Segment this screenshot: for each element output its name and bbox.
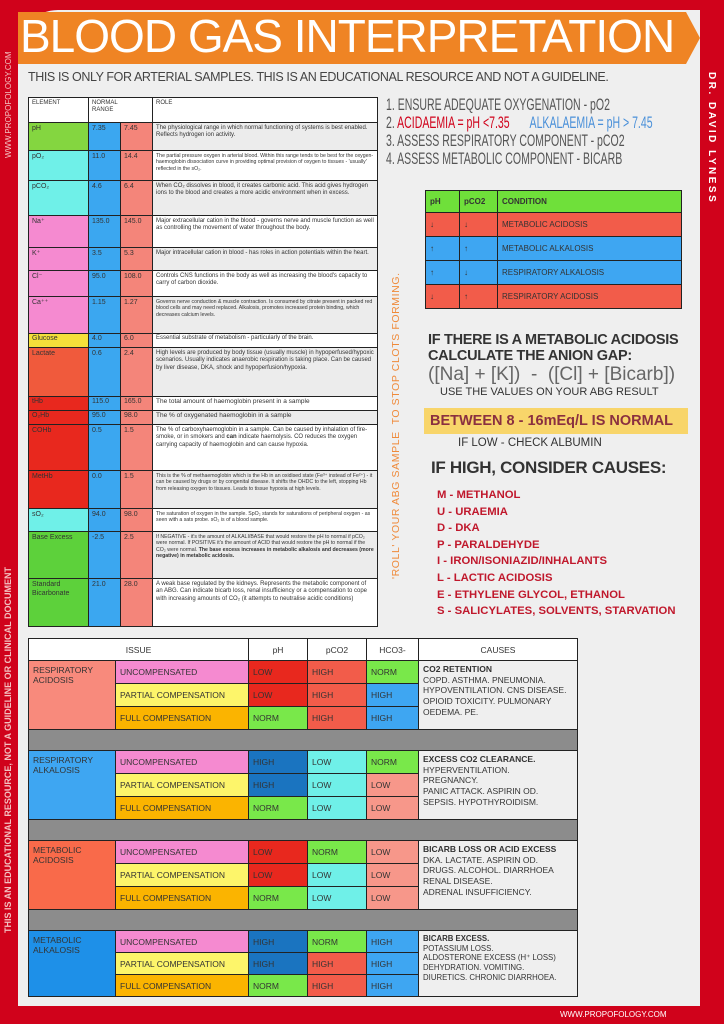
element reference table: High levels are produced by body tissue (usually muscle) in hypoperfused/hypoxic scenarios. Usually indicates anaerobic respiration is taking place. Can be caused by liver disease, DKA, shock and hypoperfusion/hypoxia. bbox=[156, 350, 374, 371]
element reference table: sO₂ bbox=[32, 511, 44, 518]
compensation table: EXCESS CO2 CLEARANCE. bbox=[423, 754, 535, 764]
compensation table: HIGH bbox=[371, 690, 392, 700]
element reference table: 0.6 bbox=[92, 350, 102, 357]
MUDPILES list: I - IRON/ISONIAZID/INHALANTS bbox=[437, 555, 607, 567]
compensation table: LOW bbox=[371, 847, 390, 857]
compensation table: COPD. ASTHMA. PNEUMONIA. HYPOVENTILATION. CNS DISEASE. OPIOID TOXICITY. PULMONARY OEDEMA. PE. bbox=[423, 675, 566, 716]
compensation table: HIGH bbox=[312, 713, 333, 723]
compensation table: HIGH bbox=[371, 713, 392, 723]
element reference table: 95.0 bbox=[92, 273, 106, 280]
element reference table: The physiological range in which normal functioning of systems is best enabled. Reflects hydrogen ion activity. bbox=[156, 125, 367, 138]
element reference table: 4.0 bbox=[92, 335, 102, 342]
low albumin note: IF LOW - CHECK ALBUMIN bbox=[458, 437, 602, 449]
compensation table: HIGH bbox=[371, 936, 392, 946]
subtitle: THIS IS ONLY FOR ARTERIAL SAMPLES. THIS IS AN EDUCATIONAL RESOURCE AND NOT A GUIDELINE. bbox=[28, 70, 608, 84]
MUDPILES list bbox=[437, 489, 676, 617]
element reference table: tHb bbox=[32, 398, 43, 405]
compensation table: HIGH bbox=[253, 757, 274, 767]
compensation table: METABOLIC ALKALOSIS bbox=[33, 935, 82, 955]
compensation table: CAUSES bbox=[481, 644, 515, 654]
compensation table bbox=[28, 638, 578, 997]
compensation table: LOW bbox=[312, 780, 331, 790]
compensation table: LOW bbox=[312, 893, 331, 903]
condition table: METABOLIC ACIDOSIS bbox=[502, 220, 588, 229]
element reference table: 6.0 bbox=[124, 335, 134, 342]
steps list: 2. ACIDAEMIA = pH <7.35 ALKALAEMIA = pH > 7.45 bbox=[386, 113, 653, 132]
compensation table: HIGH bbox=[312, 667, 333, 677]
compensation table: FULL COMPENSATION bbox=[120, 713, 211, 723]
element reference table: Base Excess bbox=[32, 534, 72, 541]
condition table: ↑ bbox=[430, 244, 434, 253]
MUDPILES list: S - SALICYLATES, SOLVENTS, STARVATION bbox=[437, 605, 676, 617]
element reference table: 98.0 bbox=[124, 511, 138, 518]
causes heading: IF HIGH, CONSIDER CAUSES: bbox=[431, 458, 666, 477]
element reference table: O₂Hb bbox=[32, 412, 49, 419]
MUDPILES list: E - ETHYLENE GLYCOL, ETHANOL bbox=[437, 589, 625, 601]
compensation table: POTASSIUM LOSS. bbox=[423, 944, 494, 953]
element reference table: The % of carboxyhaemoglobin in a sample. Can be caused by inhalation of fire-smoke, or in smokers and can indicate haemolysis. CO reduces the oxygen carrying capacity of haemoglobin and can cause hypoxia. bbox=[156, 427, 367, 448]
compensation table: HIGH bbox=[253, 936, 274, 946]
condition table: pCO2 bbox=[464, 197, 485, 206]
condition table: RESPIRATORY ACIDOSIS bbox=[502, 292, 598, 301]
compensation table: pCO2 bbox=[326, 644, 348, 654]
compensation table: NORM bbox=[253, 713, 279, 723]
steps list: 4. ASSESS METABOLIC COMPONENT - BICARB bbox=[386, 149, 622, 168]
condition table: ↓ bbox=[430, 220, 434, 229]
element reference table: Major intracellular cation in blood - has roles in action potentials within the heart. bbox=[156, 250, 369, 256]
compensation table: HIGH bbox=[312, 958, 333, 968]
compensation table: RESPIRATORY ACIDOSIS bbox=[33, 665, 93, 685]
MUDPILES list: U - URAEMIA bbox=[437, 506, 508, 518]
compensation table: LOW bbox=[312, 870, 331, 880]
element reference table: 7.45 bbox=[124, 125, 138, 132]
condition table: ↓ bbox=[430, 292, 434, 301]
element reference table: 115.0 bbox=[92, 398, 109, 405]
anion gap block bbox=[428, 332, 678, 398]
element reference table: 6.4 bbox=[124, 183, 134, 190]
element reference table: 1.15 bbox=[92, 299, 106, 306]
steps list bbox=[386, 95, 653, 168]
compensation table: pH bbox=[273, 644, 283, 654]
side text left: WWW.PROPOFOLOGY.COM bbox=[4, 52, 13, 158]
element reference table: 135.0 bbox=[92, 218, 110, 225]
compensation table: DIURETICS. CHRONIC DIARRHOEA. bbox=[423, 973, 556, 982]
element reference table: ROLE bbox=[156, 100, 172, 106]
rotated tip: roll sample: 'ROLL' YOUR ABG SAMPLE TO STOP CLOTS FORMING. bbox=[390, 273, 402, 579]
compensation table: HIGH bbox=[312, 690, 333, 700]
element reference table: 14.4 bbox=[124, 153, 138, 160]
compensation table: HIGH bbox=[253, 958, 274, 968]
element reference table: 0.0 bbox=[92, 473, 102, 480]
element reference table: NORMAL bbox=[92, 100, 118, 106]
compensation table: HIGH bbox=[371, 980, 392, 990]
element reference table: A weak base regulated by the kidneys. Represents the metabolic component of an ABG. Can indicate bicarb loss, renal insufficiency or a compensation to cope with increasing amounts of CO₂ (it attempts to neutralise acidic conditions) bbox=[156, 581, 367, 602]
element reference table: Glucose bbox=[32, 335, 58, 342]
element reference table: The total amount of haemoglobin present in a sample bbox=[156, 398, 310, 405]
compensation table: PREGNANCY. bbox=[423, 775, 478, 785]
compensation table: LOW bbox=[253, 870, 272, 880]
element reference table: 0.5 bbox=[92, 427, 102, 434]
compensation table: RESPIRATORY ALKALOSIS bbox=[33, 755, 93, 775]
compensation table: BICARB EXCESS. bbox=[423, 934, 489, 943]
compensation table: CO2 RETENTION bbox=[423, 664, 492, 674]
element reference table: Major extracellular cation in the blood - governs nerve and muscle function as well as controlling the movement of water throughout the body. bbox=[156, 218, 374, 231]
compensation table: HIGH bbox=[371, 958, 392, 968]
compensation table: LOW bbox=[371, 780, 390, 790]
element reference table: 3.5 bbox=[92, 250, 102, 257]
compensation table: FULL COMPENSATION bbox=[120, 980, 211, 990]
side text right: DR. DAVID LYNESS bbox=[706, 72, 717, 204]
element reference table: When CO₂ dissolves in blood, it creates carbonic acid. This acid gives hydrogen ions to the blood and creates a more acidic environment when in excess. bbox=[156, 183, 368, 196]
element reference table: Na⁺ bbox=[32, 218, 45, 225]
element reference table: 98.0 bbox=[124, 412, 138, 419]
element reference table: If NEGATIVE - it's the amount of ALKALI/BASE that would restore the pH to normal if pCO₂ were normal. If POSITIVE it's the amount of ACID that would restore the pH to normal if the CO₂ were normal. The base excess increases in metabolic alkalosis and decreases (more negative) in metabolic acidosis. bbox=[156, 534, 374, 559]
element reference table: 1.5 bbox=[124, 473, 134, 480]
compensation table: LOW bbox=[253, 667, 272, 677]
element reference table: 1.27 bbox=[124, 299, 138, 306]
compensation table: LOW bbox=[371, 893, 390, 903]
compensation table: FULL COMPENSATION bbox=[120, 803, 211, 813]
condition table bbox=[425, 190, 682, 309]
MUDPILES list: D - DKA bbox=[437, 522, 480, 534]
compensation table: LOW bbox=[312, 757, 331, 767]
condition table: METABOLIC ALKALOSIS bbox=[502, 244, 593, 253]
compensation table: PANIC ATTACK. ASPIRIN OD. SEPSIS. HYPOTHYROIDISM. bbox=[423, 786, 538, 806]
normal range highlight: BETWEEN 8 - 16mEq/L IS NORMAL bbox=[430, 413, 673, 429]
condition table: pH bbox=[430, 197, 441, 206]
MUDPILES list: L - LACTIC ACIDOSIS bbox=[437, 572, 552, 584]
condition table: ↑ bbox=[430, 268, 434, 277]
element reference table: RANGE bbox=[92, 107, 113, 113]
compensation table: LOW bbox=[371, 803, 390, 813]
element reference table: 1.5 bbox=[124, 427, 134, 434]
element reference table: MetHb bbox=[32, 473, 53, 480]
element reference table: 11.0 bbox=[92, 153, 105, 160]
element reference table: 7.35 bbox=[92, 125, 106, 132]
compensation table: PARTIAL COMPENSATION bbox=[120, 690, 225, 700]
compensation table: PARTIAL COMPENSATION bbox=[120, 958, 225, 968]
condition table: RESPIRATORY ALKALOSIS bbox=[502, 268, 604, 277]
compensation table: METABOLIC ACIDOSIS bbox=[33, 845, 82, 865]
compensation table: PARTIAL COMPENSATION bbox=[120, 780, 225, 790]
compensation table: LOW bbox=[253, 847, 272, 857]
element reference table: This is the % of methaemoglobin which is the Hb in an oxidised state (Fe³⁺ instead of Fe²⁺) - it can be caused by drugs or by congenital disease. It shifts the OHDC to the left, stopping Hb from releasing oxygen to tissues. Leads to tissue hypoxia at high levels. bbox=[156, 473, 372, 492]
compensation table: PARTIAL COMPENSATION bbox=[120, 870, 225, 880]
element reference table: Essential substrate of metabolism - particularly of the brain. bbox=[156, 335, 313, 341]
element reference table: COHb bbox=[32, 427, 51, 434]
compensation table: ISSUE bbox=[126, 644, 151, 654]
condition table: ↓ bbox=[464, 268, 468, 277]
compensation table: HYPERVENTILATION. bbox=[423, 765, 510, 775]
MUDPILES list: M - METHANOL bbox=[437, 489, 520, 501]
compensation table: BICARB LOSS OR ACID EXCESS bbox=[423, 844, 556, 854]
side text left bottom: THIS IS AN EDUCATIONAL RESOURCE, NOT A GUIDELINE OR CLINICAL DOCUMENT bbox=[3, 567, 13, 933]
compensation table: UNCOMPENSATED bbox=[120, 936, 197, 946]
compensation table: FULL COMPENSATION bbox=[120, 893, 211, 903]
compensation table: DKA. LACTATE. ASPIRIN OD. DRUGS. ALCOHOL. DIARRHOEA RENAL DISEASE. bbox=[423, 855, 554, 886]
element reference table: 145.0 bbox=[124, 218, 142, 225]
compensation table: ALDOSTERONE EXCESS (H⁺ LOSS) DEHYDRATION. VOMITING. bbox=[423, 953, 556, 972]
steps list: 1. ENSURE ADEQUATE OXYGENATION - pO2 bbox=[386, 95, 610, 114]
element reference table: The partial pressure oxygen in arterial blood. Within this range tends to be best for the oxygen-haemoglobin dissociation curve in providing optimal provision of oxygen to tissues - 'usually' reflected in the sO₂. bbox=[156, 153, 373, 172]
element reference table: Controls CNS functions in the body as well as increasing the blood's capacity to carry of carbon dioxide. bbox=[156, 273, 367, 286]
compensation table: UNCOMPENSATED bbox=[120, 847, 197, 857]
element reference table: Ca⁺⁺ bbox=[32, 299, 48, 306]
condition table: CONDITION bbox=[502, 197, 547, 206]
element reference table: 21.0 bbox=[92, 581, 106, 588]
element reference table: 108.0 bbox=[124, 273, 142, 280]
normal range highlight bbox=[424, 408, 688, 434]
element reference table: Standard Bicarbonate bbox=[32, 581, 69, 597]
element reference table: 2.4 bbox=[124, 350, 134, 357]
compensation table: UNCOMPENSATED bbox=[120, 667, 197, 677]
anion gap block: ([Na] + [K]) - ([Cl] + [Bicarb]) bbox=[428, 364, 675, 385]
element reference table: 4.6 bbox=[92, 183, 102, 190]
element reference table: 94.0 bbox=[92, 511, 106, 518]
compensation table: UNCOMPENSATED bbox=[120, 757, 197, 767]
compensation table: HIGH bbox=[312, 980, 333, 990]
compensation table: NORM bbox=[371, 667, 397, 677]
element reference table: 95.0 bbox=[92, 412, 106, 419]
compensation table: LOW bbox=[371, 870, 390, 880]
compensation table: LOW bbox=[253, 690, 272, 700]
footer url: WWW.PROPOFOLOGY.COM bbox=[560, 1010, 667, 1019]
steps list: 3. ASSESS RESPIRATORY COMPONENT - pCO2 bbox=[386, 131, 625, 150]
compensation table: NORM bbox=[253, 803, 279, 813]
anion gap block: IF THERE IS A METABOLIC ACIDOSIS bbox=[428, 332, 678, 348]
element reference table: Lactate bbox=[32, 350, 55, 357]
element reference table: 2.5 bbox=[124, 534, 134, 541]
element reference table bbox=[28, 97, 378, 627]
MUDPILES list: P - PARALDEHYDE bbox=[437, 539, 540, 551]
element reference table: Governs nerve conduction & muscle contraction. Is consumed by citrate present in packed red blood cells and may need replaced. Alkalosis, promotes increased protein binding, which decreases calcium levels. bbox=[156, 299, 372, 318]
condition table: ↑ bbox=[464, 292, 468, 301]
compensation table: HCO3- bbox=[379, 644, 406, 654]
anion gap block: USE THE VALUES ON YOUR ABG RESULT bbox=[440, 386, 659, 398]
condition table: ↓ bbox=[464, 220, 468, 229]
element reference table: 165.0 bbox=[124, 398, 142, 405]
compensation table: HIGH bbox=[253, 780, 274, 790]
element reference table: The % of oxygenated haemoglobin in a sample bbox=[156, 412, 292, 419]
compensation table: ADRENAL INSUFFICIENCY. bbox=[423, 886, 532, 896]
element reference table: K⁺ bbox=[32, 250, 40, 257]
compensation table: NORM bbox=[312, 847, 338, 857]
element reference table: pO₂ bbox=[32, 153, 44, 160]
compensation table: NORM bbox=[253, 893, 279, 903]
element reference table: ELEMENT bbox=[32, 100, 60, 106]
title banner: BLOOD GAS INTERPRETATION bbox=[20, 10, 674, 62]
element reference table: -2.5 bbox=[92, 534, 104, 541]
element reference table: Cl⁻ bbox=[32, 273, 42, 280]
element reference table: pCO₂ bbox=[32, 183, 49, 190]
element reference table: The saturation of oxygen in the sample. SpO₂ stands for saturations of peripheral oxygen - as seen with a sats probe. sO₂ is of a blood sample. bbox=[156, 511, 370, 523]
compensation table: NORM bbox=[371, 757, 397, 767]
condition table: ↑ bbox=[464, 244, 468, 253]
compensation table: LOW bbox=[312, 803, 331, 813]
anion gap block: CALCULATE THE ANION GAP: bbox=[428, 348, 632, 364]
compensation table: NORM bbox=[312, 936, 338, 946]
element reference table: pH bbox=[32, 125, 41, 132]
compensation table: NORM bbox=[253, 980, 279, 990]
element reference table: 5.3 bbox=[124, 250, 134, 257]
element reference table: 28.0 bbox=[124, 581, 138, 588]
